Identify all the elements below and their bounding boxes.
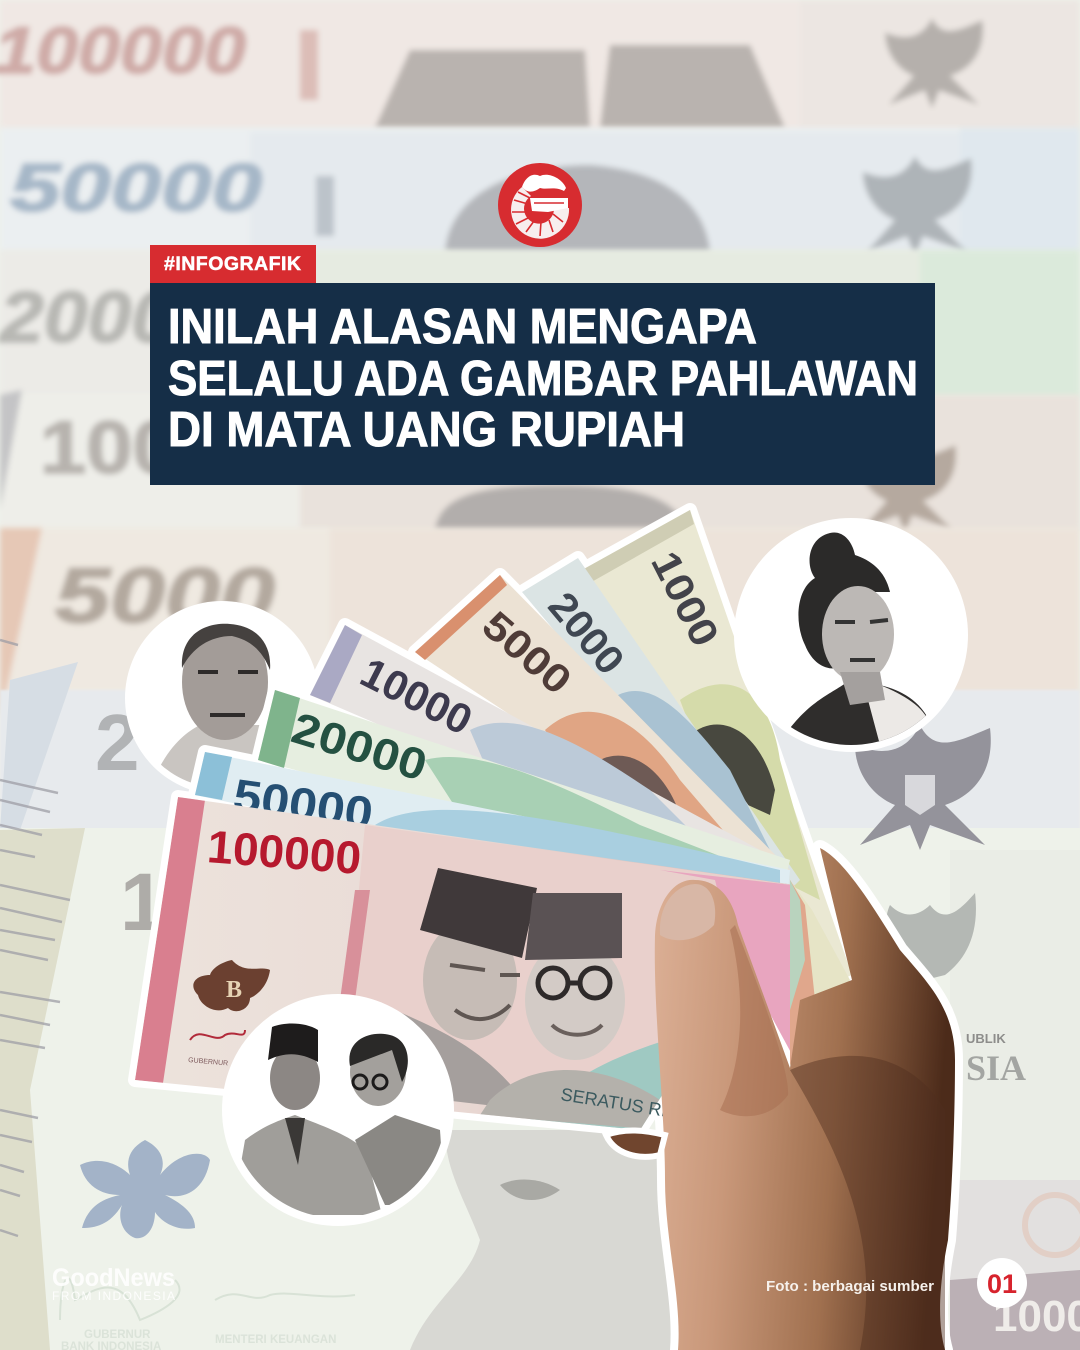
note: 1000 — [582, 510, 852, 1000]
icon: orchid — [80, 1140, 210, 1238]
title line 1: INILAH ALASAN MENGAPA — [168, 300, 757, 354]
Soekarno — [232, 1115, 382, 1215]
icon: orchid mark — [193, 960, 270, 1011]
band: 10000 note — [0, 390, 1080, 533]
white sticker outline — [135, 510, 852, 1130]
band: 2000 note: 2 — [95, 698, 140, 787]
note: 50000 — [195, 752, 790, 920]
watermark: GoodNews from Indonesia: GoodNews — [52, 1264, 175, 1292]
signatures — [60, 1278, 355, 1320]
band: 2000 note — [0, 662, 1080, 835]
note: 5000 — [415, 575, 790, 880]
note: 1000: 1000 — [642, 545, 727, 654]
note: 5000: 5000 — [474, 603, 579, 703]
note: 10000: 10000 — [353, 648, 480, 744]
portrait circle: Soekarno and Hatta — [222, 994, 454, 1226]
G ring — [511, 187, 569, 239]
note: 20000 — [258, 690, 790, 900]
title line 2: SELALU ADA GAMBAR PAHLAWAN — [168, 352, 918, 406]
banknote fan — [135, 510, 852, 1140]
band: 5000 note — [0, 528, 1080, 720]
left edge ticks — [0, 640, 70, 1236]
photo credit: Foto : berbagai sumber — [766, 1278, 934, 1295]
band: 1000 note: 1 — [120, 857, 166, 948]
caption: gubernur: GUBERNUR — [84, 1329, 151, 1341]
watermark tagline: FROM INDONESIA — [52, 1289, 175, 1303]
thumbnail — [660, 884, 715, 940]
title panel — [150, 283, 935, 485]
caption: signature — [190, 1030, 245, 1040]
watermark: GoodNews from Indonesia — [52, 1264, 175, 1303]
portrait circle: top left hero — [125, 601, 319, 795]
page number badge: 01 — [987, 1269, 1017, 1299]
Hatta — [355, 1115, 445, 1205]
portrait circle: top right heroine — [734, 518, 968, 752]
icon: orchid mark: B — [226, 977, 242, 1003]
title line 3: DI MATA UANG RUPIAH — [168, 403, 685, 457]
band: 5000 note: 5000 — [55, 551, 275, 639]
caption: menteri keuangan: MENTERI KEUANGAN — [215, 1334, 336, 1346]
ghost face under notes — [410, 1130, 690, 1350]
eagle head — [522, 175, 566, 192]
note edges beside thumb — [790, 880, 850, 1065]
tag: #INFOGRAFIK — [150, 245, 316, 283]
note: 50000: 50000 — [230, 769, 376, 840]
back of note behind thumb — [660, 870, 795, 1060]
portrait: Soekarno on note — [395, 868, 537, 1110]
note: 100000 — [135, 797, 795, 1140]
logo: GNFI garuda roundel — [498, 163, 582, 247]
caption: seratus ribu: SERATUS RIBU — [559, 1084, 693, 1125]
numeral: 100000: 100000 — [205, 820, 363, 884]
band: 1000 note: SIA — [966, 1048, 1026, 1088]
band: 20000 note: 2000 — [0, 278, 175, 358]
band: 50000 note — [0, 128, 1080, 256]
caption: republik indonesia: UBLIK — [966, 1031, 1006, 1046]
G bar — [530, 198, 568, 212]
finger behind note — [606, 1130, 665, 1157]
band: 1000 note — [0, 828, 1080, 1350]
icon: garuda lower right — [886, 893, 976, 980]
page number badge — [977, 1258, 1027, 1308]
caption: gubernur on note: GUBERNUR — [188, 1057, 228, 1067]
band: 100000 note — [0, 0, 1080, 130]
band: 10000 note: 1000 — [40, 406, 225, 489]
icon: garuda right — [855, 725, 991, 850]
band: 50000 note: 50000 — [10, 150, 262, 226]
hand outline — [655, 848, 955, 1350]
note: 10000 — [310, 625, 760, 880]
note: 20000: 20000 — [286, 704, 432, 791]
tag: #INFOGRAFIK: #INFOGRAFIK — [164, 253, 301, 275]
band: 100000 note: 100000 — [0, 13, 246, 87]
hand holding notes — [606, 848, 955, 1350]
portrait: Hatta on note — [480, 893, 660, 1130]
note: 2000: 2000 — [540, 584, 632, 683]
band: 20000 note — [0, 250, 1080, 397]
note: 2000 — [522, 558, 800, 900]
